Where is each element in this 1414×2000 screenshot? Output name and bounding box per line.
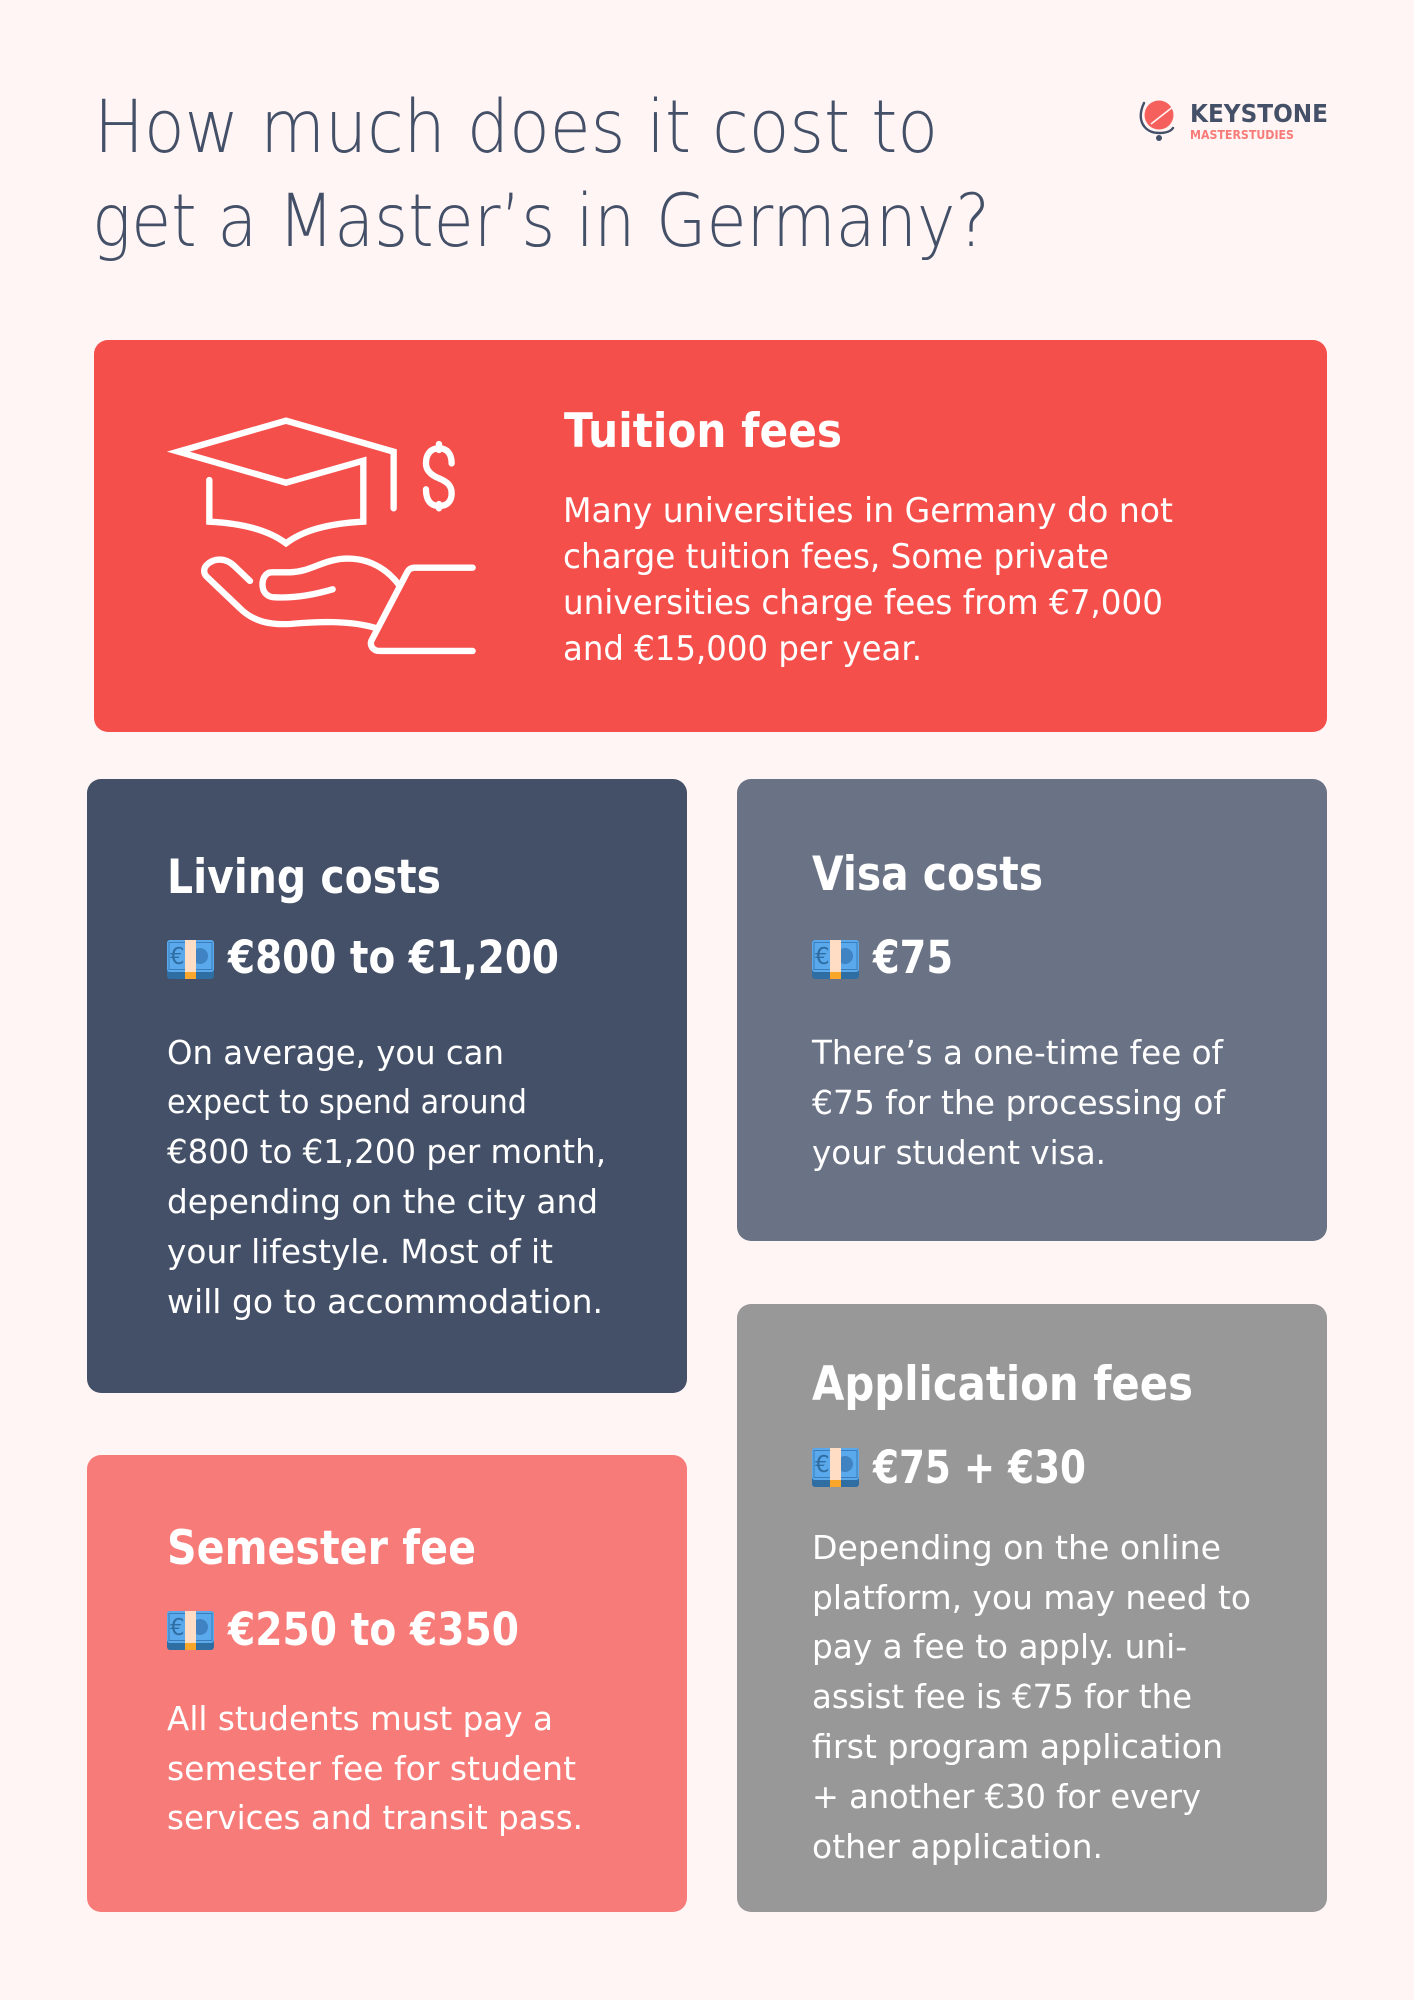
text: application fees description: assist fee is €75 for the bbox=[812, 1678, 1192, 1716]
text: application fees description: Depending on the online bbox=[812, 1529, 1221, 1567]
icon: euro banknote: € bbox=[815, 944, 830, 970]
text: semester fee description: services and transit pass. bbox=[167, 1799, 583, 1837]
text: living costs description: expect to spend around bbox=[167, 1083, 527, 1121]
text: visa costs description: €75 for the processing of bbox=[812, 1084, 1227, 1122]
title: get a Master’s in Germany? bbox=[92, 179, 990, 264]
text: semester fee description bbox=[167, 1700, 583, 1837]
text: visa costs description bbox=[811, 1034, 1227, 1172]
text: application fees description: first program application bbox=[812, 1728, 1223, 1766]
text: application fees description bbox=[812, 1529, 1251, 1866]
panel: tuition fees bbox=[94, 340, 1327, 732]
price: application fees: €75 + €30 bbox=[872, 1441, 1086, 1494]
title: How much does it cost to bbox=[94, 85, 938, 170]
icon: euro banknote: € bbox=[170, 1615, 185, 1641]
icon: globe bbox=[1141, 100, 1174, 141]
heading: application fees: Application fees bbox=[812, 1357, 1193, 1412]
text: tuition description: charge tuition fees, Some private bbox=[563, 537, 1109, 576]
icon: euro banknote bbox=[812, 1448, 859, 1487]
heading: semester fee: Semester fee bbox=[167, 1521, 476, 1576]
text: living costs description: will go to accommodation. bbox=[167, 1283, 603, 1321]
icon: euro banknote bbox=[167, 940, 214, 979]
title bbox=[92, 85, 990, 264]
heading: visa costs: Visa costs bbox=[812, 847, 1043, 902]
text: living costs description: On average, you can bbox=[167, 1034, 504, 1072]
text: semester fee description: All students must pay a bbox=[167, 1700, 553, 1738]
text: visa costs description: There’s a one-time fee of bbox=[811, 1034, 1225, 1072]
text: tuition description bbox=[563, 491, 1173, 668]
text: tuition description: Many universities in Germany do not bbox=[563, 491, 1173, 530]
icon: euro banknote: € bbox=[170, 944, 185, 970]
text: application fees description: platform, you may need to bbox=[812, 1579, 1251, 1617]
text: tuition description: universities charge fees from €7,000 bbox=[563, 583, 1163, 622]
text: visa costs description: your student visa. bbox=[812, 1134, 1106, 1172]
text: living costs description: depending on the city and bbox=[167, 1183, 598, 1221]
price: visa costs: €75 bbox=[872, 931, 953, 984]
text: semester fee description: semester fee for student bbox=[167, 1750, 576, 1788]
text: application fees description: + another €30 for every bbox=[812, 1778, 1201, 1816]
panel: application fees bbox=[737, 1304, 1327, 1912]
logo: Keystone Masterstudies bbox=[1141, 99, 1328, 142]
logo: Keystone Masterstudies: KEYSTONE bbox=[1190, 99, 1328, 128]
icon: graduation cap on a hand with dollar sign bbox=[178, 421, 473, 651]
text: application fees description: other application. bbox=[812, 1828, 1103, 1866]
panel: visa costs bbox=[737, 779, 1327, 1241]
text: tuition description: and €15,000 per year. bbox=[563, 629, 922, 668]
icon: euro banknote bbox=[812, 940, 859, 979]
heading: tuition fees: Tuition fees bbox=[564, 404, 842, 459]
text: living costs description: your lifestyle. Most of it bbox=[167, 1233, 553, 1271]
price: semester fee: €250 to €350 bbox=[227, 1603, 519, 1656]
price: living costs: €800 to €1,200 bbox=[227, 931, 559, 984]
icon: euro banknote bbox=[167, 1611, 214, 1650]
text: application fees description: pay a fee to apply. uni- bbox=[812, 1628, 1187, 1666]
text: living costs description bbox=[167, 1034, 606, 1321]
icon: euro banknote: € bbox=[815, 1452, 830, 1478]
panel: living costs bbox=[87, 779, 687, 1393]
heading: living costs: Living costs bbox=[167, 850, 441, 905]
logo: Keystone Masterstudies: MASTERSTUDIES bbox=[1190, 128, 1294, 142]
text: living costs description: €800 to €1,200 per month, bbox=[167, 1133, 606, 1171]
panel: semester fee bbox=[87, 1455, 687, 1912]
